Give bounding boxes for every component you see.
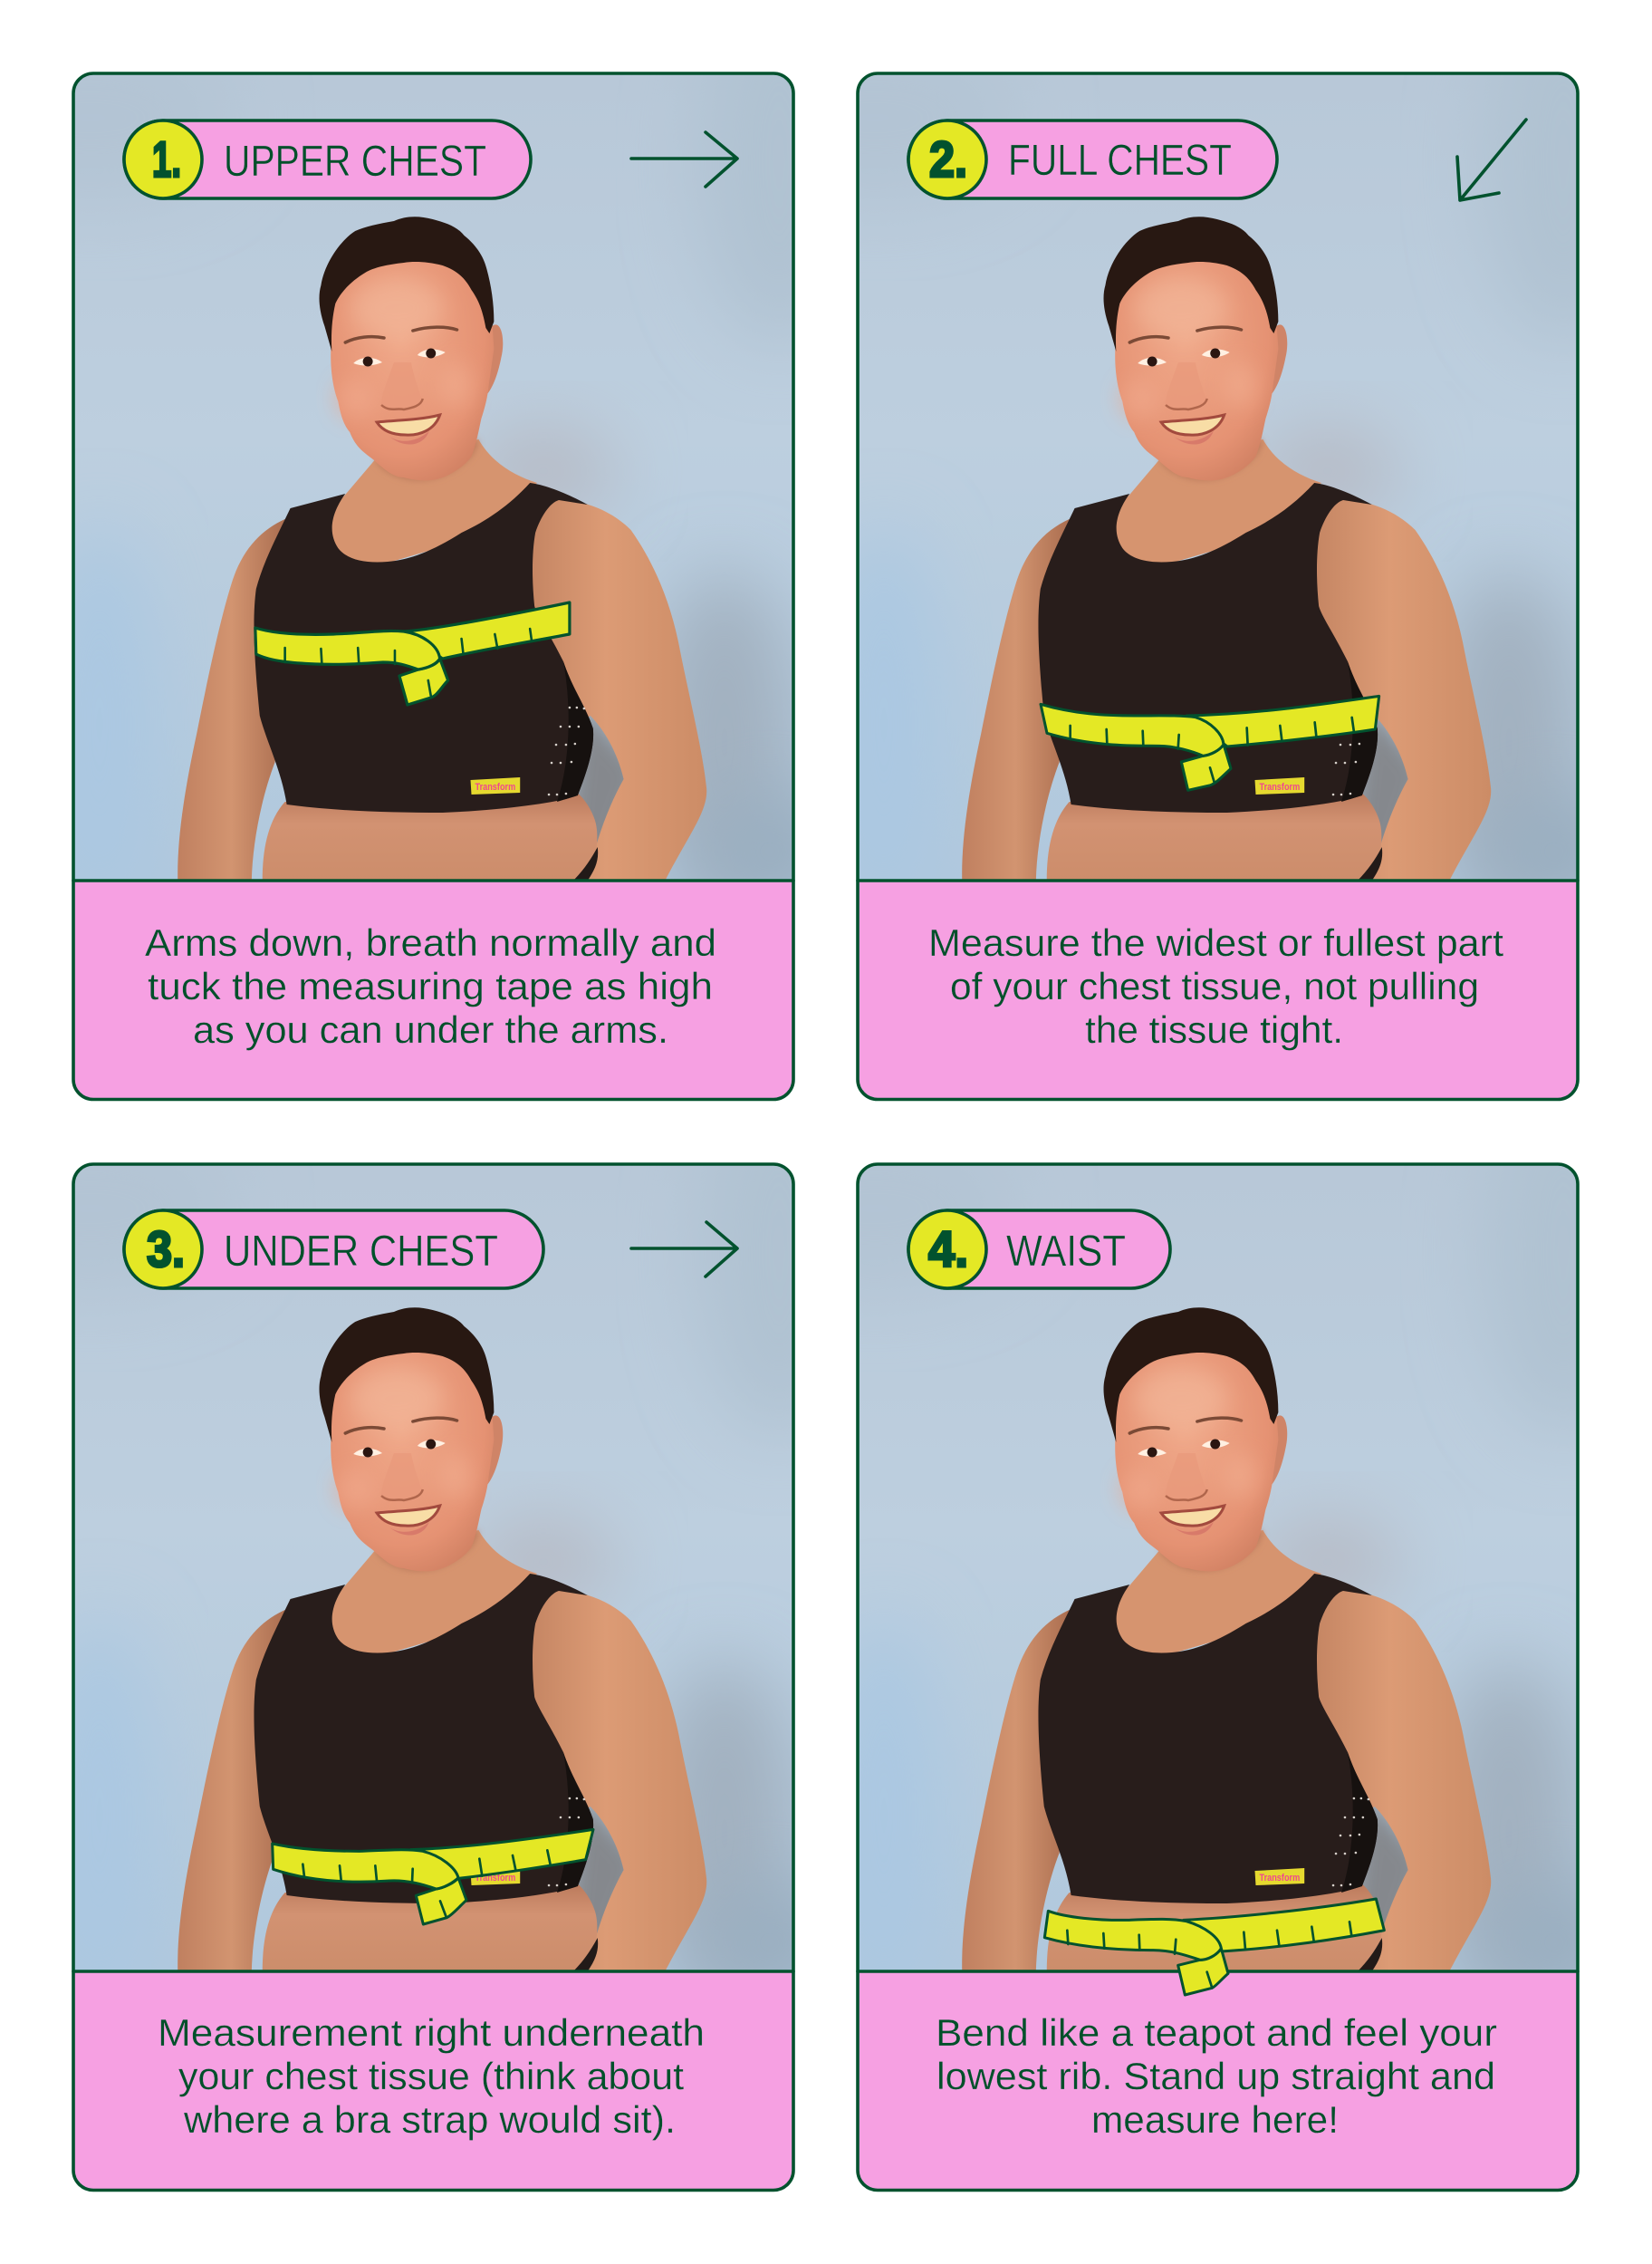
- measuring tape: full chest: [1041, 696, 1379, 790]
- caption text: your chest tissue (think about: [178, 2055, 684, 2097]
- caption text: of your chest tissue, not pulling: [950, 965, 1479, 1007]
- caption text: [145, 921, 716, 1051]
- caption panel background: [858, 1971, 1578, 2191]
- caption text: [158, 2011, 705, 2141]
- caption divider and card frame: [73, 1164, 793, 2191]
- caption text: Bend like a teapot and feel your: [936, 2011, 1497, 2054]
- caption text: [928, 921, 1503, 1051]
- panel: step 3 under chest: [0, 1073, 860, 2191]
- measuring tape: waist: [1044, 1899, 1384, 1995]
- heading pill: upper chest: 1.: [152, 130, 181, 188]
- heading pill: upper chest: [124, 120, 531, 198]
- caption text: Arms down, breath normally and: [145, 921, 716, 964]
- photo: person in black binder: [962, 217, 1491, 881]
- caption text: [936, 2011, 1497, 2141]
- caption text: the tissue tight.: [1085, 1008, 1343, 1051]
- caption divider and card frame: [858, 1164, 1578, 2191]
- caption text: Measurement right underneath: [158, 2011, 705, 2054]
- photo: person in black binder: [962, 1307, 1491, 1971]
- panel: step 4 waist: [730, 1073, 1645, 2191]
- caption panel background: [73, 881, 793, 1100]
- measuring tape: upper chest: [255, 602, 570, 705]
- heading pill: under chest: UNDER CHEST: [224, 1228, 498, 1276]
- heading pill: upper chest: UPPER CHEST: [224, 138, 486, 186]
- arrow: down-left to next step: [1457, 120, 1526, 200]
- caption divider and card frame: [858, 73, 1578, 1100]
- caption divider and card frame: [73, 73, 793, 1100]
- arrow: right to next step: [631, 132, 737, 187]
- arrow: right to next step: [631, 1222, 737, 1277]
- caption text: measure here!: [1091, 2098, 1339, 2141]
- caption text: where a bra strap would sit).: [183, 2098, 676, 2141]
- panel: step 2 full chest: [730, 0, 1645, 1100]
- measuring tape: under chest: [273, 1829, 593, 1924]
- photo background: [0, 0, 860, 924]
- caption text: as you can under the arms.: [193, 1008, 668, 1051]
- caption panel background: [858, 881, 1578, 1100]
- caption text: lowest rib. Stand up straight and: [936, 2055, 1495, 2097]
- photo: person in black binder: [178, 1307, 706, 1971]
- heading pill: under chest: [124, 1210, 543, 1288]
- caption text: Measure the widest or fullest part: [928, 921, 1503, 964]
- heading pill: waist: WAIST: [1006, 1228, 1126, 1276]
- caption text: tuck the measuring tape as high: [148, 965, 713, 1007]
- heading pill: waist: [908, 1210, 1170, 1288]
- photo background: [730, 1073, 1645, 2015]
- photo: person in black binder: [178, 217, 706, 881]
- photo background: [730, 0, 1645, 924]
- heading pill: full chest: 2.: [929, 130, 967, 188]
- heading pill: full chest: [908, 120, 1277, 198]
- heading pill: full chest: FULL CHEST: [1008, 137, 1232, 185]
- heading pill: under chest: 3.: [147, 1220, 185, 1277]
- heading pill: waist: 4.: [928, 1220, 968, 1277]
- panel: step 1 upper chest: [0, 0, 860, 1100]
- caption panel background: [73, 1971, 793, 2191]
- photo background: [0, 1073, 860, 2015]
